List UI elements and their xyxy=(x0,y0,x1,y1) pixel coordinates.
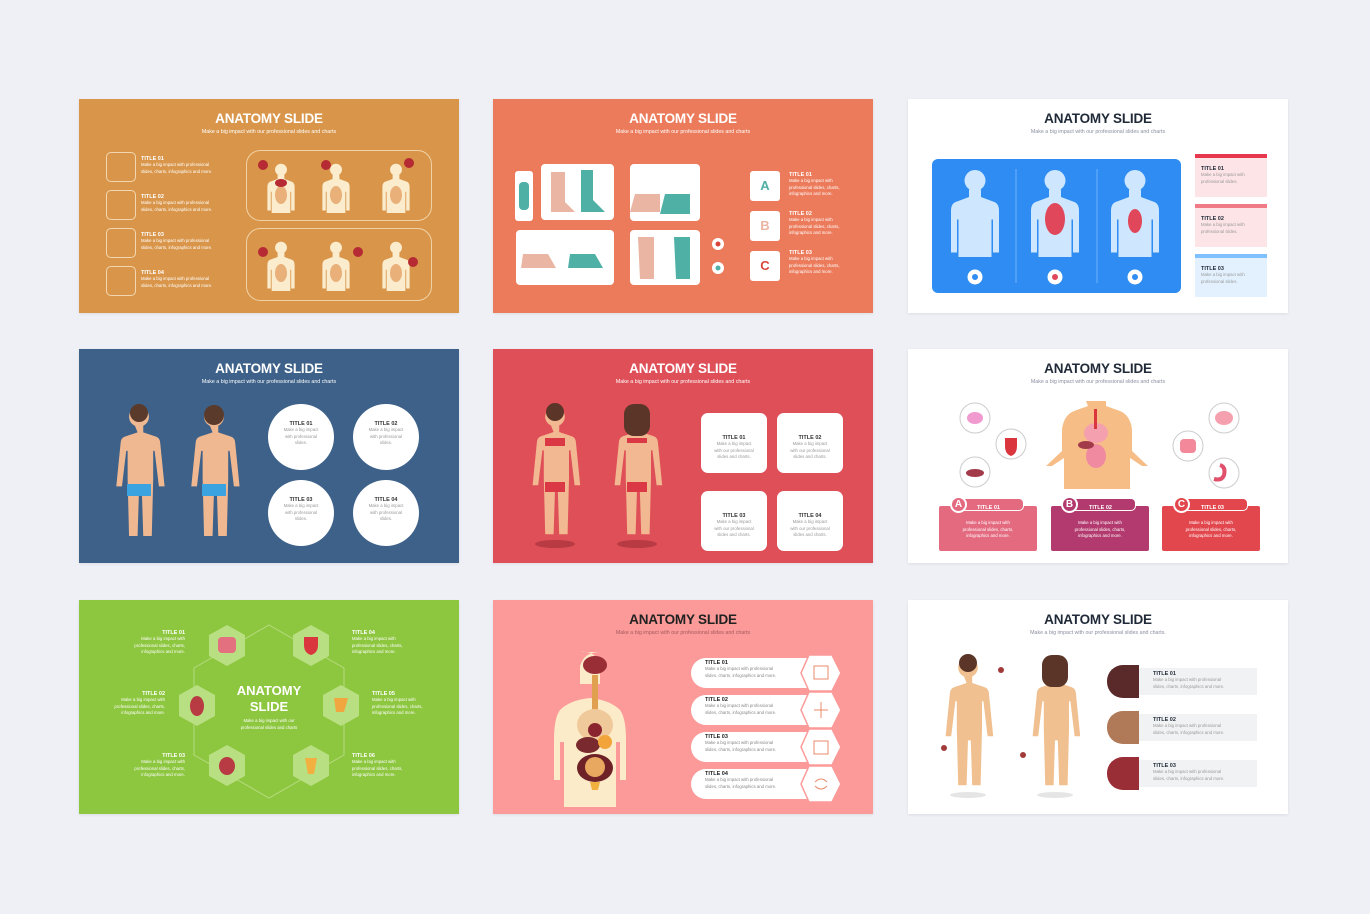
boxes: A B C: professional slides, charts, xyxy=(1075,526,1125,532)
title: ANATOMY SLIDE xyxy=(1044,612,1152,627)
circles: titles: Make a big impact xyxy=(369,503,403,508)
circles: titles: slides. xyxy=(380,440,392,445)
list: titles: Make a big impact with professional xyxy=(141,238,209,243)
cards: titles: slides and charts. xyxy=(793,454,827,459)
list: titles: TITLE 04 xyxy=(141,270,164,276)
cards: titles: Make a big impact xyxy=(793,441,827,446)
cards: titles: TITLE 03 xyxy=(723,513,745,519)
list: cards: Make a big impact with xyxy=(1201,222,1245,227)
left texts: infographics and more. xyxy=(141,649,185,654)
title: ANATOMY SLIDE xyxy=(629,111,737,126)
right texts: infographics and more. xyxy=(352,772,396,777)
list: A B C: Make a big impact with xyxy=(789,256,833,261)
right texts: TITLE 04 xyxy=(352,630,375,636)
cards: titles: slides and charts. xyxy=(717,454,751,459)
list: items: TITLE 02 xyxy=(1153,717,1176,723)
figure: torso with organs and icons xyxy=(960,401,1240,489)
circles: titles: TITLE 04 xyxy=(375,497,397,503)
cards: titles: with our professional xyxy=(714,526,754,530)
slide 6: organs A B C xyxy=(908,349,1288,563)
list: items: slides, charts, infographics and more. xyxy=(1153,776,1224,780)
circles: titles: with professional xyxy=(285,510,317,514)
list: cards: TITLE 02 xyxy=(1201,216,1224,222)
subtitle: Make a big impact with our professional slides and charts xyxy=(1031,129,1165,135)
list: titles: TITLE 02 xyxy=(141,194,164,200)
list: pills with hex icons: TITLE 03 xyxy=(705,734,728,740)
right texts: Make a big impact with xyxy=(352,759,396,764)
slide 8: pink systems xyxy=(493,600,873,814)
list: cards: TITLE 03 xyxy=(1201,266,1224,272)
center title: professional slides and charts xyxy=(241,724,297,730)
slide 9: female anatomy white xyxy=(908,600,1288,814)
right texts: infographics and more. xyxy=(372,710,416,715)
right texts: professional slides, charts, xyxy=(352,642,403,648)
title: ANATOMY SLIDE xyxy=(215,111,323,126)
list: A B C xyxy=(750,171,840,281)
list: titles xyxy=(106,152,212,296)
left texts: professional slides, charts, xyxy=(134,642,185,648)
list: items: slides, charts, infographics and more. xyxy=(1153,730,1224,734)
title: ANATOMY SLIDE xyxy=(1044,361,1152,376)
subtitle: Make a big impact with our professional slides and charts xyxy=(202,379,336,385)
boxes: A B C: TITLE 03 xyxy=(1201,505,1224,511)
cards: titles xyxy=(701,413,843,551)
title: ANATOMY SLIDE xyxy=(215,361,323,376)
subtitle: Make a big impact with our professional slides and charts xyxy=(616,630,750,636)
cards: titles: with our professional xyxy=(790,526,830,530)
title: ANATOMY SLIDE xyxy=(629,361,737,376)
list: titles: Make a big impact with professional xyxy=(141,200,209,205)
circles: titles xyxy=(268,404,419,546)
figures: women xyxy=(941,654,1080,798)
list: pills with hex icons: Make a big impact with professional xyxy=(705,740,773,745)
list: A B C: Make a big impact with xyxy=(789,217,833,222)
cards: titles: Make a big impact xyxy=(717,519,751,524)
slide 2: feet x-ray xyxy=(493,99,873,313)
left texts: professional slides, charts, xyxy=(114,704,165,708)
left texts: professional slides, charts, xyxy=(134,766,185,770)
list: A B C: professional slides, charts, xyxy=(789,262,840,268)
cards: feet images xyxy=(515,164,700,285)
subtitle: Make a big impact with our professional slides and charts xyxy=(616,129,750,135)
boxes: A B C: infographics and more. xyxy=(1078,533,1122,538)
icons: eye buttons xyxy=(712,238,724,274)
boxes: A B C: TITLE 02 xyxy=(1089,505,1112,511)
list: A B C: infographics and more. xyxy=(789,191,833,196)
circles: titles: TITLE 01 xyxy=(290,421,312,427)
list: A B C: TITLE 01 xyxy=(789,172,812,178)
boxes: A B C: A xyxy=(955,499,962,510)
cards: titles: TITLE 02 xyxy=(799,435,821,441)
circles: titles: slides. xyxy=(295,440,307,445)
list: cards: professional slides. xyxy=(1201,228,1238,234)
circles: titles: TITLE 02 xyxy=(375,421,397,427)
circles: titles: TITLE 03 xyxy=(290,497,312,503)
boxes: A B C: infographics and more. xyxy=(1189,533,1233,538)
boxes: A B C xyxy=(939,498,1260,551)
list: items: TITLE 01 xyxy=(1153,671,1176,677)
circles: titles: slides. xyxy=(295,516,307,521)
boxes: A B C: B xyxy=(1066,499,1073,510)
right texts: infographics and more. xyxy=(352,649,396,654)
list: titles: slides, charts, infographics and more. xyxy=(141,244,212,250)
list: A B C: professional slides, charts, xyxy=(789,184,840,190)
slide 7: hexagon organs xyxy=(79,600,459,814)
list: titles: Make a big impact with professional xyxy=(141,162,209,167)
list: items: Make a big impact with professional xyxy=(1153,723,1221,728)
list: cards: professional slides. xyxy=(1201,178,1238,184)
left texts: TITLE 03 xyxy=(162,753,185,759)
list: A B C: professional slides, charts, xyxy=(789,224,840,228)
list: items: TITLE 03 xyxy=(1153,763,1176,769)
left texts: infographics and more. xyxy=(141,772,185,777)
list: pills with hex icons: slides, charts, infographics and more. xyxy=(705,746,776,752)
cards: titles: Make a big impact xyxy=(793,519,827,524)
title: ANATOMY SLIDE xyxy=(1044,111,1152,126)
center title: ANATOMY xyxy=(237,683,301,698)
list: items xyxy=(1107,665,1257,790)
boxes: A B C: professional slides, charts, xyxy=(963,526,1013,532)
figure: body with organs xyxy=(554,652,626,807)
boxes: A B C: Make a big impact with xyxy=(966,520,1010,525)
list: pills with hex icons: Make a big impact with professional xyxy=(705,703,773,708)
left texts: Make a big impact with xyxy=(141,636,185,641)
right texts: TITLE 05 xyxy=(372,691,395,697)
list: pills with hex icons xyxy=(691,656,840,802)
left texts: TITLE 01 xyxy=(162,630,185,636)
left texts: infographics and more. xyxy=(121,710,165,715)
boxes: A B C: professional slides, charts, xyxy=(1186,526,1236,532)
slide 5: female body xyxy=(493,349,873,563)
subtitle: Make a big impact with our professional slides and charts xyxy=(202,129,336,135)
list: pills with hex icons: slides, charts, infographics and more. xyxy=(705,672,776,678)
cards: titles: slides and charts. xyxy=(793,532,827,537)
list: titles: TITLE 03 xyxy=(141,232,164,238)
hexagon diagram xyxy=(179,624,359,798)
subtitle: Make a big impact with our professional slides and charts. xyxy=(1030,630,1166,636)
subtitle: Make a big impact with our professional slides and charts xyxy=(1031,379,1165,385)
list: A B C: B xyxy=(760,218,770,233)
circles: titles: with professional xyxy=(285,434,317,438)
list: pills with hex icons: slides, charts, infographics and more. xyxy=(705,710,776,714)
left texts: Make a big impact with xyxy=(141,759,185,764)
list: cards xyxy=(1195,154,1267,297)
cards: titles: slides and charts. xyxy=(717,532,751,537)
list: titles: TITLE 01 xyxy=(141,156,164,162)
boxes: A B C: C xyxy=(1178,499,1185,510)
circles: titles: slides. xyxy=(380,516,392,521)
left texts xyxy=(114,630,185,777)
right texts: Make a big impact with xyxy=(352,636,396,641)
cards: titles: TITLE 04 xyxy=(799,513,821,519)
circles: titles: with professional xyxy=(370,434,402,438)
center title xyxy=(237,683,301,730)
circles: titles: Make a big impact xyxy=(369,427,403,432)
right texts: professional slides, charts, xyxy=(352,766,403,770)
list: items: Make a big impact with professional xyxy=(1153,769,1221,774)
circles: titles: Make a big impact xyxy=(284,503,318,508)
list: pills with hex icons: Make a big impact with professional xyxy=(705,777,773,782)
right texts: TITLE 06 xyxy=(352,753,375,759)
right texts: Make a big impact with xyxy=(372,697,416,702)
list: pills with hex icons: Make a big impact with professional xyxy=(705,666,773,671)
right texts xyxy=(352,630,423,777)
boxes: A B C: Make a big impact with xyxy=(1078,520,1122,525)
cards: titles: with our professional xyxy=(714,448,754,452)
circles: titles: Make a big impact xyxy=(284,427,318,432)
cards: titles: with our professional xyxy=(790,448,830,452)
list: pills with hex icons: TITLE 01 xyxy=(705,660,728,666)
slide 4: male body xyxy=(79,349,459,563)
list: A B C: TITLE 03 xyxy=(789,250,812,256)
figures: women xyxy=(532,403,662,548)
list: cards: Make a big impact with xyxy=(1201,172,1245,177)
slide 3: skeletons xyxy=(908,99,1288,313)
center title: SLIDE xyxy=(250,699,288,714)
boxes: A B C: TITLE 01 xyxy=(977,505,1000,511)
circles: titles: with professional xyxy=(370,510,402,514)
panel: blue x-ray xyxy=(932,159,1181,293)
cards: titles: TITLE 01 xyxy=(723,435,745,441)
list: cards: TITLE 01 xyxy=(1201,166,1224,172)
list: A B C: A xyxy=(760,178,770,193)
boxes: A B C: Make a big impact with xyxy=(1189,520,1233,525)
title: ANATOMY SLIDE xyxy=(629,612,737,627)
list: A B C: TITLE 02 xyxy=(789,211,812,217)
right texts: professional slides, charts, xyxy=(372,704,423,708)
list: items: slides, charts, infographics and more. xyxy=(1153,684,1224,688)
list: A B C: C xyxy=(760,258,770,273)
list: A B C: infographics and more. xyxy=(789,230,833,235)
list: items: Make a big impact with professional xyxy=(1153,677,1221,682)
list: pills with hex icons: slides, charts, infographics and more. xyxy=(705,784,776,788)
subtitle: Make a big impact with our professional slides and charts xyxy=(616,379,750,385)
center title: Make a big impact with our xyxy=(243,718,295,723)
list: A B C: infographics and more. xyxy=(789,269,833,274)
list: titles: Make a big impact with professional xyxy=(141,276,209,281)
list: pills with hex icons: TITLE 02 xyxy=(705,697,728,703)
list: titles: slides, charts, infographics and more. xyxy=(141,282,212,288)
list: A B C: Make a big impact with xyxy=(789,178,833,183)
panel: torsos xyxy=(246,150,432,301)
list: cards: professional slides. xyxy=(1201,278,1238,284)
list: titles: slides, charts, infographics and more. xyxy=(141,206,212,212)
boxes: A B C: infographics and more. xyxy=(966,533,1010,538)
left texts: TITLE 02 xyxy=(142,691,165,697)
list: cards: Make a big impact with xyxy=(1201,272,1245,277)
figures: men xyxy=(116,404,240,536)
slide 1: orange organs xyxy=(79,99,459,313)
list: pills with hex icons: TITLE 04 xyxy=(705,771,728,777)
left texts: Make a big impact with xyxy=(121,697,165,702)
list: titles: slides, charts, infographics and more. xyxy=(141,168,212,174)
cards: titles: Make a big impact xyxy=(717,441,751,446)
